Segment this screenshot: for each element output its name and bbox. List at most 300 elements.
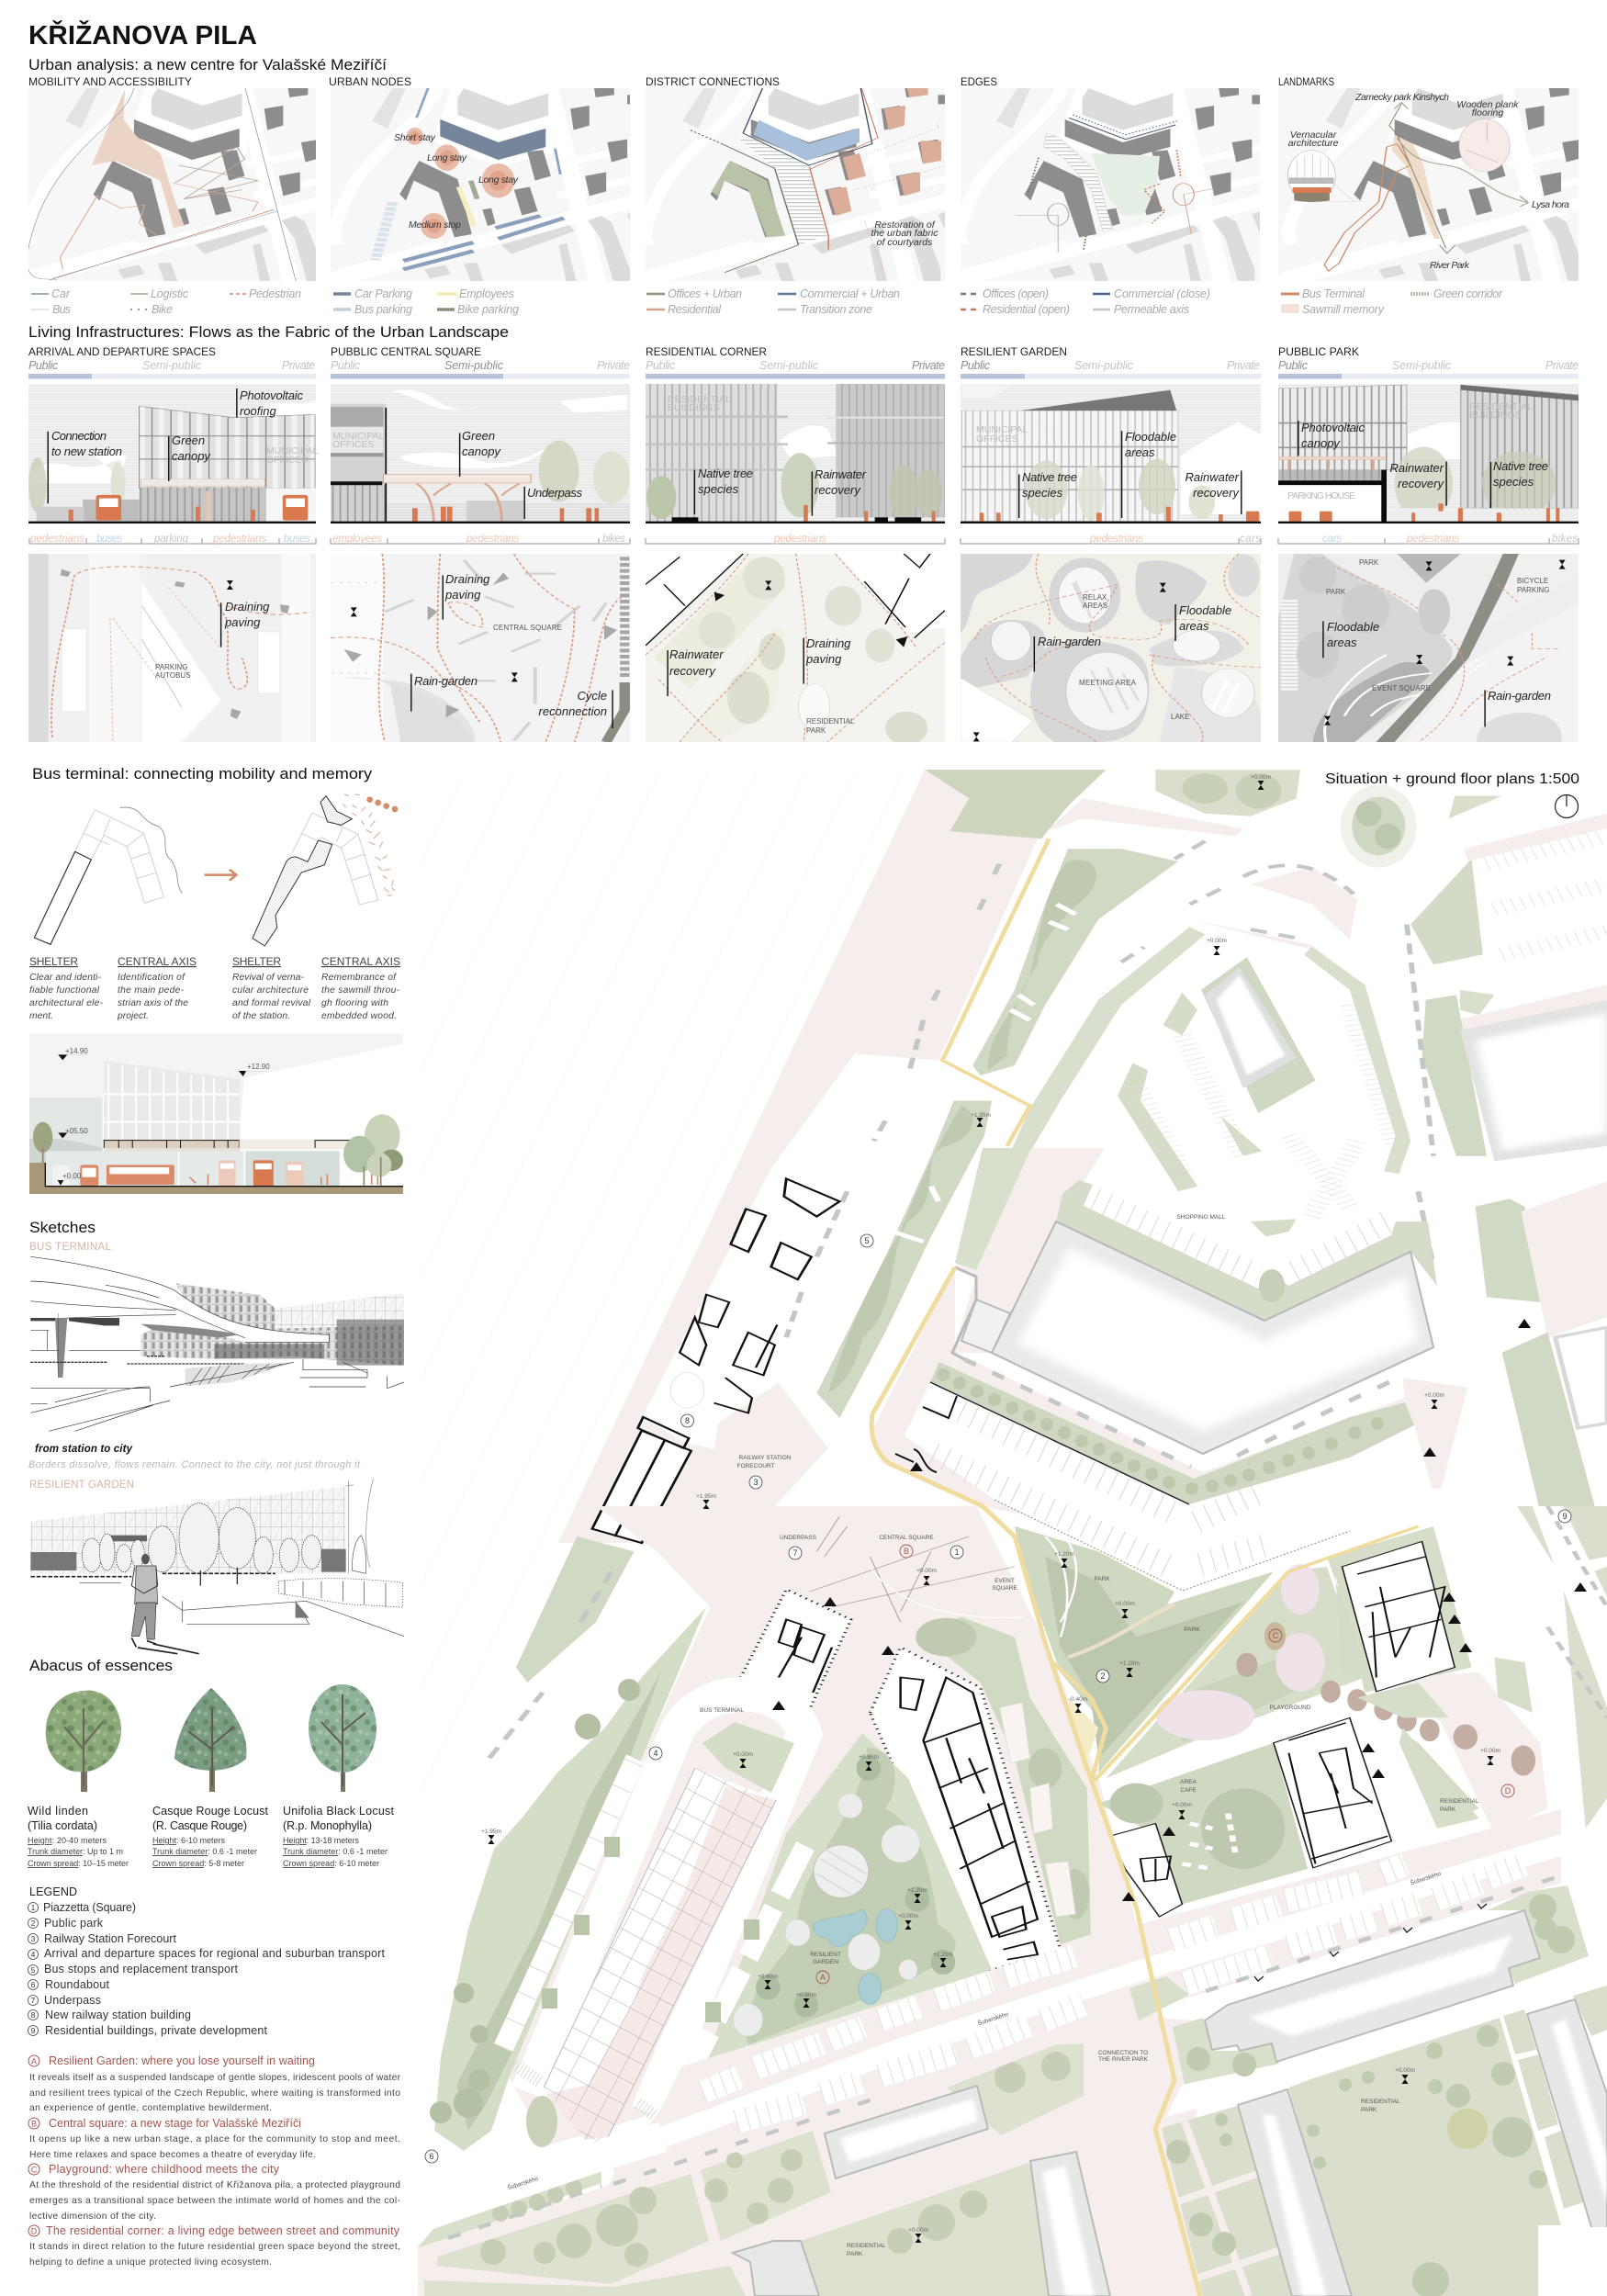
- detail plan: public park: PARK: [1326, 588, 1346, 596]
- legend: mobility: Bike: [152, 303, 173, 316]
- detail plan: public park: PARKING: [1517, 586, 1549, 594]
- detail plan: arrival and departure: [28, 554, 316, 742]
- zone scale rows: pedestrians: [29, 534, 84, 545]
- elevation markers: [489, 781, 1493, 2243]
- note B: B: [31, 2120, 37, 2129]
- section: resilient garden: [961, 384, 1261, 523]
- detail plan: residential corner: Rainwater: [669, 647, 724, 661]
- elevation labels: +0.00m: [1172, 1802, 1192, 1808]
- place labels: [506, 1214, 1479, 2257]
- detail plan: arrival and departure: Draining: [225, 600, 270, 613]
- captions: design moves: embedded wood.: [321, 1011, 397, 1021]
- note B: [28, 2117, 400, 2160]
- numbered markers: 5: [864, 1236, 870, 1245]
- section: central square: Green: [462, 429, 495, 443]
- legend: edges: Offices (open): [983, 287, 1049, 300]
- map: connections: [682, 88, 945, 281]
- legend: edges: Residential (open): [983, 303, 1070, 316]
- elevation labels: +1.95m: [971, 1112, 991, 1119]
- icon: north compass: [1556, 795, 1578, 817]
- figure: person: [131, 1554, 199, 1654]
- captions: design moves: CENTRAL AXIS: [321, 955, 400, 968]
- detail plan: residential corner: Draining: [806, 636, 851, 650]
- landmark labels: Zamecky park Kinshych: [1354, 92, 1449, 103]
- legend: connections: Residential: [668, 303, 722, 316]
- detail plan: central square: Cycle: [577, 689, 607, 703]
- tree: wild linden: Wild linden: [28, 1805, 88, 1818]
- detail plan: resilient garden: [961, 554, 1261, 742]
- detail plan: public park: PARK: [1359, 558, 1379, 567]
- detail plan: residential corner: recovery: [669, 664, 716, 678]
- place labels: RESIDENTIAL: [1440, 1798, 1479, 1805]
- place labels: AREA: [1180, 1779, 1197, 1785]
- section headings: ARRIVAL AND DEPARTURE SPACES: [28, 345, 216, 358]
- zone scale rows: cars: [1322, 534, 1342, 545]
- landmark labels: Lysa hora: [1532, 199, 1569, 210]
- numbered markers: B: [904, 1547, 909, 1556]
- zone scale rows: buses: [96, 534, 122, 545]
- heading: bus terminal: Bus terminal: connecting mobility and memory: [32, 765, 373, 782]
- public to private gradient scales: Public: [331, 359, 361, 372]
- annotation: restoration: Restoration of: [874, 219, 936, 231]
- legend: nodes: Bike parking: [457, 303, 519, 316]
- public to private gradient scales: Private: [1227, 359, 1260, 372]
- note C: Playground: where childhood meets the city: [49, 2163, 280, 2176]
- direction arrows: [772, 1319, 1587, 1901]
- landmark labels: Vernacular: [1290, 129, 1337, 141]
- tree: unifolia black locust: (R.p. Monophylla): [283, 1819, 372, 1832]
- public to private gradient scales: Private: [912, 359, 945, 372]
- captions: design moves: SHELTER: [232, 955, 281, 968]
- public to private gradient scales: Public: [28, 359, 59, 372]
- place labels: PARK: [1094, 1576, 1110, 1582]
- detail plan: resilient garden: Floodable: [1179, 603, 1231, 617]
- subtitle: urban analysis: Urban analysis: a new centre for Valašské Meziříčí: [28, 56, 387, 73]
- legend: numbered list: 3: [31, 1934, 36, 1943]
- diagram: before: [34, 807, 182, 944]
- place labels: CENTRAL SQUARE: [879, 1535, 934, 1541]
- heading: situation plan: Situation + ground floor plans 1:500: [1325, 771, 1579, 787]
- panel: urban nodes: URBAN NODES: [329, 75, 411, 88]
- legend: numbered list: 6: [31, 1980, 36, 1989]
- map: edges: [996, 88, 1260, 281]
- tree: wild linden: [28, 1691, 129, 1868]
- legend: connections: [646, 287, 900, 316]
- legend: nodes: Bus parking: [354, 303, 412, 316]
- place labels: UNDERPASS: [780, 1535, 817, 1541]
- section drawing: bus terminal: +14.90: [65, 1047, 88, 1055]
- elevation labels: +1.95m: [481, 1829, 501, 1835]
- numbered markers: 1: [954, 1548, 960, 1557]
- public to private gradient scales: Semi-public: [759, 359, 819, 372]
- zone scale rows: bikes: [602, 534, 625, 545]
- caption: from station to city: from station to city: [35, 1444, 133, 1455]
- section: public park: BUILDINGS: [1469, 410, 1522, 421]
- detail plan: residential corner: PARK: [806, 726, 826, 735]
- detail plan: resilient garden: LAKE: [1171, 713, 1189, 721]
- tree: unifolia black locust: Unifolia Black Locust: [283, 1805, 395, 1818]
- section: public park: [1278, 384, 1579, 523]
- note C: lective dimension of the city.: [29, 2212, 156, 2222]
- section: arrival and departure: MUNICIPAL: [266, 445, 319, 456]
- section: arrival and departure: Green: [172, 433, 205, 447]
- legend: numbered list: 9: [31, 2026, 36, 2035]
- panel: edges: [920, 75, 1289, 316]
- detail plan: public park: EVENT SQUARE: [1372, 684, 1431, 692]
- diagram: after: [253, 794, 398, 946]
- note B: Central square: a new stage for Valašské Meziříči: [49, 2117, 301, 2130]
- landmark labels: architecture: [1288, 138, 1339, 149]
- section: public park: RESIDENTIAL: [1469, 401, 1533, 412]
- panel: district connections: [606, 75, 975, 316]
- section drawing: bus terminal: +0.00: [62, 1172, 82, 1180]
- legend: numbered list: Bus stops and replacement transport: [44, 1963, 239, 1975]
- section: resilient garden: recovery: [1193, 486, 1240, 500]
- numbered markers: 8: [685, 1416, 690, 1425]
- detail plan: central square: Rain-garden: [414, 674, 478, 688]
- section: arrival and departure: roofing: [240, 404, 277, 418]
- zone scale rows: employees: [332, 534, 382, 545]
- legend: mobility: [31, 287, 301, 316]
- note D: helping to define a unique protected living ecosystem.: [29, 2257, 272, 2268]
- section: public park: recovery: [1398, 477, 1444, 490]
- heading: abacus of essences: Abacus of essences: [29, 1657, 173, 1674]
- elevation labels: +0.00m: [1207, 938, 1227, 944]
- public to private gradient scales: Semi-public: [142, 359, 202, 372]
- section: public park: canopy: [1301, 436, 1341, 450]
- place labels: RESIDENTIAL: [1361, 2099, 1400, 2105]
- section drawing: bus terminal: +05.50: [65, 1127, 88, 1135]
- note A: A: [31, 2057, 37, 2066]
- captions: design moves: strian axis of the: [118, 998, 188, 1008]
- panel: mobility and accessibility: [0, 75, 358, 316]
- legend: numbered list: 4: [31, 1950, 36, 1959]
- elevation labels: +1.95m: [696, 1493, 716, 1500]
- section: arrival and departure: Photovoltaic: [240, 388, 303, 402]
- zone scale rows: cars: [1240, 534, 1261, 545]
- section: residential corner: [646, 384, 945, 523]
- zone scale rows: parking: [153, 534, 189, 545]
- numbered markers: C: [1273, 1631, 1279, 1640]
- captions: design moves: cular architecture: [232, 985, 309, 996]
- place labels: THE RIVER PARK: [1098, 2056, 1149, 2063]
- elevation labels: +0.80m: [758, 1974, 778, 1980]
- zone scale rows: pedestrians: [1406, 534, 1459, 545]
- detail plan: resilient garden: areas: [1179, 619, 1209, 633]
- detail plan: arrival and departure: PARKING: [155, 663, 187, 671]
- note A: an experience of gentle, contemplative bewilderment.: [29, 2103, 272, 2113]
- captions: design moves: the main pede-: [118, 985, 185, 996]
- public to private gradient scales: Semi-public: [444, 359, 504, 372]
- public to private gradient scales: Public: [961, 359, 991, 372]
- place labels: Šubarského: [976, 2009, 1009, 2027]
- plan: central districts: [487, 1506, 1607, 2145]
- note C: At the threshold of the residential district of Křižanova pila, a protected playground: [29, 2180, 400, 2190]
- legend: landmarks: Bus Terminal: [1302, 287, 1365, 300]
- tree: casque rouge locust: Crown spread: 5-8 meter: [152, 1859, 244, 1868]
- legend: landmarks: [1281, 287, 1503, 316]
- zone scale rows: pedestrians: [1089, 534, 1143, 545]
- label: bus terminal sketch: BUS TERMINAL: [29, 1242, 112, 1253]
- detail plan: arrival and departure: paving: [224, 615, 261, 629]
- legend: nodes: [333, 287, 519, 316]
- detail plan: central square: reconnection: [539, 704, 607, 718]
- title: KŘIŽANOVA PILA: [28, 19, 257, 51]
- panel: landmarks: LANDMARKS: [1278, 75, 1334, 88]
- captions: design moves: CENTRAL AXIS: [118, 955, 197, 968]
- legend: mobility: Car: [51, 287, 71, 300]
- section: residential corner: Rainwater: [815, 467, 867, 481]
- numbered markers: 7: [792, 1548, 798, 1558]
- place labels: PARK: [847, 2251, 863, 2257]
- detail plan: central square: [331, 554, 630, 742]
- legend: connections: Transition zone: [800, 303, 872, 316]
- captions: design moves: SHELTER: [29, 955, 78, 968]
- legend: numbered list: Underpass: [44, 1994, 101, 2007]
- legend: numbered list: Railway Station Forecourt: [44, 1932, 177, 1945]
- concept diagrams: bus terminal: [34, 794, 398, 946]
- detail plan: public park: Rain-garden: [1488, 689, 1551, 703]
- panel: edges: EDGES: [961, 75, 997, 88]
- zone scale rows: pedestrians: [212, 534, 266, 545]
- public to private gradient scales: Public: [1278, 359, 1309, 372]
- section: public park: species: [1493, 475, 1534, 489]
- heading: sketches: Sketches: [29, 1219, 96, 1236]
- note C: emerges as a transitional space between the intimate world of homes and the col-: [29, 2196, 400, 2206]
- heading: living infrastructures: Living Infrastructures: Flows as the Fabric of the Urban Landscape: [28, 323, 509, 341]
- legend: numbered list: Residential buildings, private development: [45, 2024, 268, 2037]
- tree: unifolia black locust: [283, 1684, 395, 1868]
- captions: design moves: architectural ele-: [29, 998, 104, 1008]
- captions: design moves: [29, 955, 400, 1021]
- note C: C: [31, 2166, 38, 2175]
- numbered markers: A: [820, 1973, 826, 1982]
- elevation labels: +1.20m: [1054, 1551, 1074, 1558]
- captions: design moves: fiable functional: [29, 985, 100, 996]
- captions: design moves: project.: [117, 1011, 149, 1021]
- legend: landmarks: Sawmill memory: [1302, 303, 1385, 316]
- tree: wild linden: Trunk diameter: Up to 1 m: [28, 1847, 123, 1856]
- elevation labels: +0.80m: [859, 1754, 879, 1761]
- annotation: restoration: the urban fabric: [871, 228, 938, 239]
- detail plan: public park: Floodable: [1327, 620, 1379, 634]
- detail plan: resilient garden: AREAS: [1083, 602, 1107, 610]
- section: public park: PARKING HOUSE: [1287, 490, 1355, 501]
- elevation labels: -0.40m: [1069, 1696, 1087, 1703]
- place labels: GARDEN: [813, 1959, 838, 1965]
- note D: It stands in direct relation to the future residential green space beyond the street,: [29, 2242, 400, 2252]
- captions: design moves: of the station.: [232, 1011, 290, 1021]
- numbered markers: 2: [1100, 1671, 1106, 1681]
- elevation labels: [481, 774, 1500, 2234]
- detail plan: public park: [1278, 554, 1579, 742]
- section: central square: OFFICES: [332, 439, 375, 450]
- elevation labels: +0.00m: [1115, 1601, 1135, 1607]
- tree: casque rouge locust: Trunk diameter: 0.6 -1 meter: [152, 1847, 257, 1856]
- elevation labels: +0.00m: [908, 2227, 928, 2234]
- node labels: [394, 132, 519, 231]
- tree: unifolia black locust: Crown spread: 6-10 meter: [283, 1859, 379, 1868]
- note B: Here time relaxes and space becomes a theatre of everyday life.: [29, 2150, 316, 2160]
- legend: numbered list: 8: [31, 2010, 36, 2020]
- public to private gradient scales: [28, 359, 1579, 378]
- section: residential corner: recovery: [815, 483, 861, 497]
- detail plan: public park: BICYCLE: [1517, 577, 1548, 585]
- legend: numbered list: 2: [31, 1919, 36, 1928]
- section: residential corner: species: [698, 482, 739, 496]
- landmark labels: [1288, 92, 1569, 271]
- legend: connections: Offices + Urban: [668, 287, 742, 300]
- legend: mobility: Logistic: [151, 287, 189, 300]
- site plan: situation and ground floor: [418, 770, 1607, 2296]
- section: arrival and departure: Connection: [51, 429, 107, 443]
- numbered markers: 6: [429, 2152, 434, 2161]
- plan: northern half: [558, 770, 1607, 1543]
- legend: numbered list: New railway station building: [45, 2009, 191, 2021]
- legend: numbered list: 1: [31, 1903, 36, 1912]
- tree: casque rouge locust: (R. Casque Rouge): [152, 1819, 247, 1832]
- section: central square: canopy: [462, 445, 501, 458]
- section: residential corner: BUILDINGS: [668, 402, 720, 413]
- note D: [28, 2224, 400, 2268]
- section: public park: Rainwater: [1389, 461, 1444, 475]
- node labels: Long stay: [427, 152, 467, 163]
- caption text: Borders dissolve, flows remain. Connect to the city, not just through it: [28, 1459, 361, 1470]
- zone scale rows: pedestrians: [773, 534, 826, 545]
- elevation labels: +0.00m: [733, 1751, 753, 1758]
- note B: It opens up like a new urban stage, a place for the community to stop and meet.: [29, 2134, 400, 2144]
- elevation labels: +0.00m: [898, 1913, 918, 1919]
- detail plan: resilient garden: MEETING AREA: [1079, 679, 1137, 687]
- legend: mobility: Bus: [52, 303, 71, 316]
- numbered markers: 9: [1562, 1512, 1568, 1521]
- label: resilient garden sketch: RESILIENT GARDEN: [29, 1480, 134, 1491]
- section: resilient garden: species: [1022, 486, 1063, 500]
- arrow: [205, 870, 236, 881]
- captions: design moves: Revival of verna-: [232, 973, 305, 983]
- captions: design moves: Remembrance of: [321, 973, 397, 983]
- node labels: Short stay: [394, 132, 436, 143]
- numbered markers: D: [1505, 1786, 1511, 1795]
- landmark labels: Wooden plank: [1456, 99, 1519, 110]
- section: resilient garden: Native tree: [1022, 470, 1077, 484]
- place labels: PARK: [1440, 1806, 1456, 1813]
- note D: D: [31, 2226, 38, 2235]
- section headings: RESIDENTIAL CORNER: [646, 345, 767, 358]
- captions: design moves: gh flooring with: [321, 998, 388, 1008]
- section: public park: Native tree: [1493, 459, 1548, 473]
- legend: landmarks: Green corridor: [1433, 287, 1503, 300]
- legend: edges: [961, 287, 1210, 316]
- place labels: PARK: [1361, 2107, 1377, 2113]
- zone scale rows: buses: [284, 534, 310, 545]
- detail plan: residential corner: RESIDENTIAL: [806, 717, 855, 726]
- place labels: RAILWAY STATION: [739, 1455, 792, 1461]
- place labels: RESIDENTIAL: [847, 2243, 886, 2249]
- legend: nodes: Employees: [459, 287, 514, 300]
- section headings: PUBBLIC PARK: [1278, 345, 1359, 358]
- detail plan: resilient garden: RELAX: [1083, 593, 1107, 602]
- detail plan: residential corner: [646, 554, 945, 745]
- numbered markers: 4: [653, 1749, 658, 1758]
- tree: casque rouge locust: [152, 1688, 269, 1868]
- place labels: CONNECTION TO: [1098, 2050, 1148, 2056]
- note A: and resilient trees typical of the Czech Republic, where waiting is transformed into: [29, 2088, 400, 2099]
- zone scale rows: bikes: [1552, 534, 1578, 545]
- tree: unifolia black locust: Height: 13-18 meters: [283, 1836, 360, 1845]
- place labels: CAFE: [1180, 1787, 1197, 1794]
- elevation labels: +0.00m: [1395, 2067, 1415, 2074]
- section headings: PUBBLIC CENTRAL SQUARE: [331, 345, 481, 358]
- legend: edges: Commercial (close): [1114, 287, 1210, 300]
- tree: wild linden: (Tilia cordata): [28, 1819, 97, 1832]
- legend: numbered list: Roundabout: [45, 1978, 110, 1991]
- place labels: RESILIENT: [810, 1952, 841, 1958]
- section drawing: bus terminal: [29, 1033, 403, 1194]
- detail plan: central square: paving: [444, 588, 481, 602]
- sketch: bus terminal: [30, 1256, 404, 1431]
- legend: mobility: Pedestrian: [249, 287, 301, 300]
- section: residential corner: RESIDENTIAL: [668, 394, 731, 405]
- landmark labels: flooring: [1472, 107, 1503, 118]
- place labels: BUS TERMINAL: [700, 1707, 744, 1714]
- public to private gradient scales: Private: [597, 359, 630, 372]
- zone scale rows: [29, 534, 1579, 545]
- public to private gradient scales: Public: [646, 359, 676, 372]
- public to private gradient scales: Private: [1545, 359, 1579, 372]
- captions: design moves: Clear and identi-: [29, 973, 102, 983]
- captions: design moves: the sawmill throu-: [321, 985, 400, 996]
- map: landmarks: [1287, 88, 1579, 281]
- map: mobility: [28, 88, 316, 281]
- note D: The residential corner: a living edge between street and community: [46, 2224, 400, 2237]
- tree: wild linden: Crown spread: 10–15 meter: [28, 1859, 129, 1868]
- legend: numbered list: Arrival and departure spaces for regional and suburban transport: [44, 1947, 386, 1960]
- legend: nodes: Car Parking: [354, 287, 412, 300]
- captions: design moves: ment.: [29, 1011, 53, 1021]
- legend: numbered list: LEGEND: [29, 1885, 77, 1898]
- place labels: PLAYGROUND: [1269, 1705, 1311, 1711]
- elevation labels: +1.20m: [933, 1952, 953, 1958]
- note C: [28, 2163, 400, 2222]
- legend: numbered list: Piazzetta (Square): [43, 1901, 136, 1914]
- plan: southern neighbourhood: [418, 1506, 1607, 2296]
- node labels: Long stay: [478, 174, 519, 186]
- section: resilient garden: OFFICES: [976, 433, 1018, 445]
- section headings: [28, 345, 1359, 358]
- legend: numbered list: Public park: [44, 1917, 104, 1930]
- zone scale rows: pedestrians: [466, 534, 519, 545]
- place labels: SQUARE: [992, 1585, 1017, 1592]
- elevation labels: +0.00m: [1251, 774, 1271, 781]
- detail plan: residential corner: paving: [805, 652, 842, 666]
- section: resilient garden: Rainwater: [1185, 470, 1240, 484]
- annotation: restoration: [871, 219, 938, 248]
- section: resilient garden: Floodable: [1125, 430, 1176, 444]
- place labels: SHOPPING MALL: [1176, 1214, 1226, 1221]
- elevation labels: +1.20m: [1119, 1660, 1140, 1667]
- panel: landmarks: [1249, 75, 1607, 316]
- public to private gradient scales: Semi-public: [1074, 359, 1134, 372]
- panel: district connections: DISTRICT CONNECTIONS: [646, 75, 780, 88]
- section: arrival and departure: to new station: [51, 445, 122, 458]
- text block: design notes: [28, 2054, 401, 2268]
- numbered markers: [425, 1234, 1571, 2163]
- note A: [28, 2054, 401, 2113]
- section: central square: Underpass: [527, 486, 582, 500]
- numbered markers: 3: [753, 1478, 759, 1487]
- tree: casque rouge locust: Height: 6-10 meters: [152, 1836, 226, 1845]
